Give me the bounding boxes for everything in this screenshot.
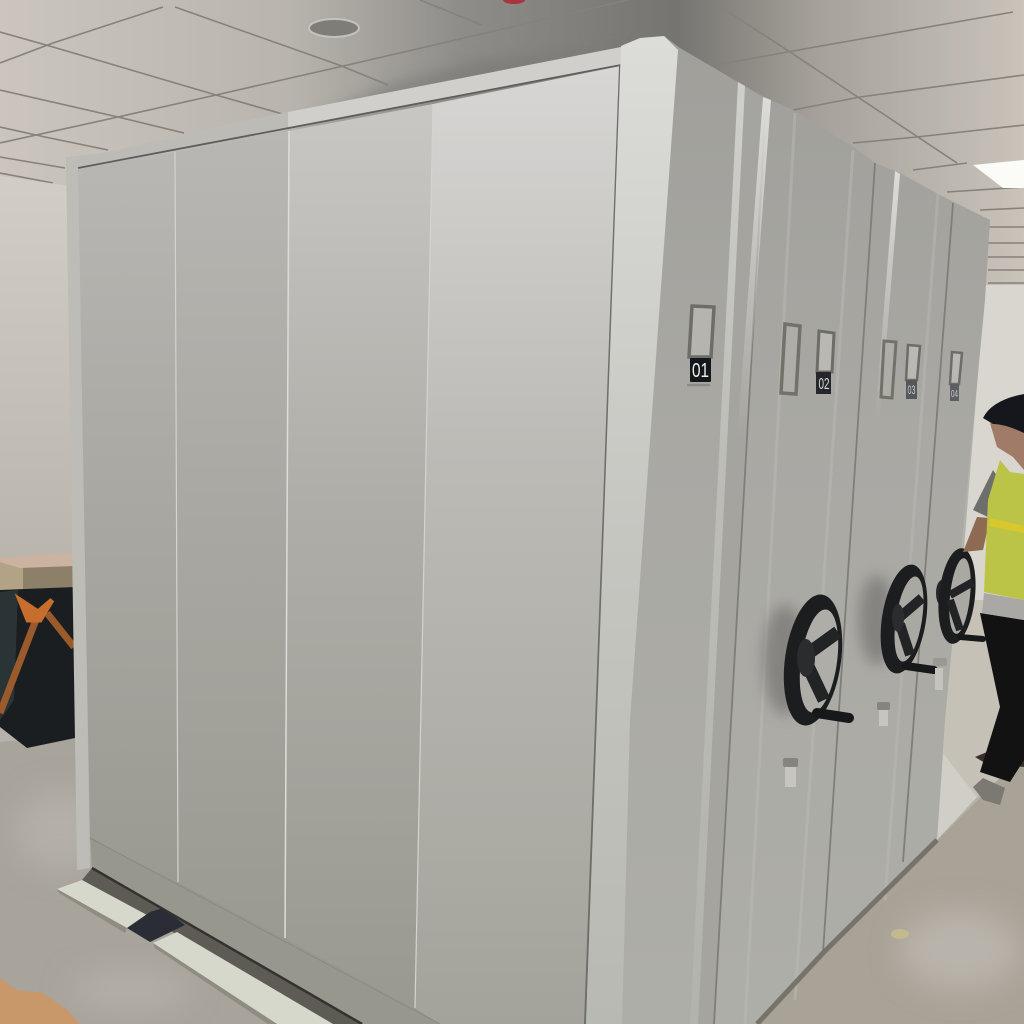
front panel 2	[175, 131, 289, 938]
ceiling light	[973, 160, 1024, 188]
shirt hem	[982, 593, 1024, 620]
label holder 03	[906, 345, 920, 399]
lock 2	[877, 702, 890, 726]
label holder blank	[881, 341, 896, 398]
back foot	[975, 752, 1024, 767]
lock 3	[933, 658, 947, 690]
plinth	[90, 838, 440, 1024]
ceiling	[0, 0, 1024, 300]
back wall left	[0, 176, 80, 570]
corner post	[586, 36, 678, 1024]
label holder 04	[950, 352, 962, 401]
front panel 1	[78, 152, 178, 882]
sprinkler	[503, 0, 525, 4]
side silhouette	[585, 36, 990, 1024]
ceiling speaker	[309, 19, 359, 37]
head	[990, 423, 1024, 470]
back wall right	[960, 285, 1024, 600]
label holder 02: 02	[818, 376, 830, 393]
label holder 01	[687, 306, 714, 385]
bright strips	[737, 97, 771, 440]
worker	[963, 394, 1024, 805]
side seams	[745, 113, 853, 1024]
legs	[980, 613, 1024, 782]
front panel 3	[285, 104, 433, 1008]
floor rail	[57, 868, 362, 1024]
side strip 1	[698, 86, 763, 1024]
rail bracket	[127, 908, 185, 942]
label holder 01: 01	[692, 360, 709, 382]
base rail	[757, 840, 937, 1024]
shoe	[973, 778, 1005, 805]
lock 1	[783, 758, 798, 787]
hand wheel 3	[934, 546, 983, 646]
label holder 03: 03	[908, 383, 916, 397]
pallet fragment	[0, 978, 80, 1024]
label holder blank	[781, 324, 800, 394]
label holder 04: 04	[951, 389, 958, 400]
boxes at left	[0, 553, 75, 748]
wheel shadows	[763, 605, 807, 715]
hand wheel 1	[776, 591, 850, 729]
label holder 02	[816, 331, 834, 394]
panel seams	[175, 104, 433, 1008]
arm	[963, 517, 990, 552]
sleeve	[973, 470, 1000, 518]
cabinet top trim	[66, 47, 621, 168]
floor	[0, 600, 1024, 1024]
hand wheel 2	[874, 561, 934, 677]
safety vest	[984, 460, 1024, 600]
left end frame	[66, 157, 90, 870]
front panel 4	[415, 66, 620, 1024]
hair	[983, 394, 1024, 433]
